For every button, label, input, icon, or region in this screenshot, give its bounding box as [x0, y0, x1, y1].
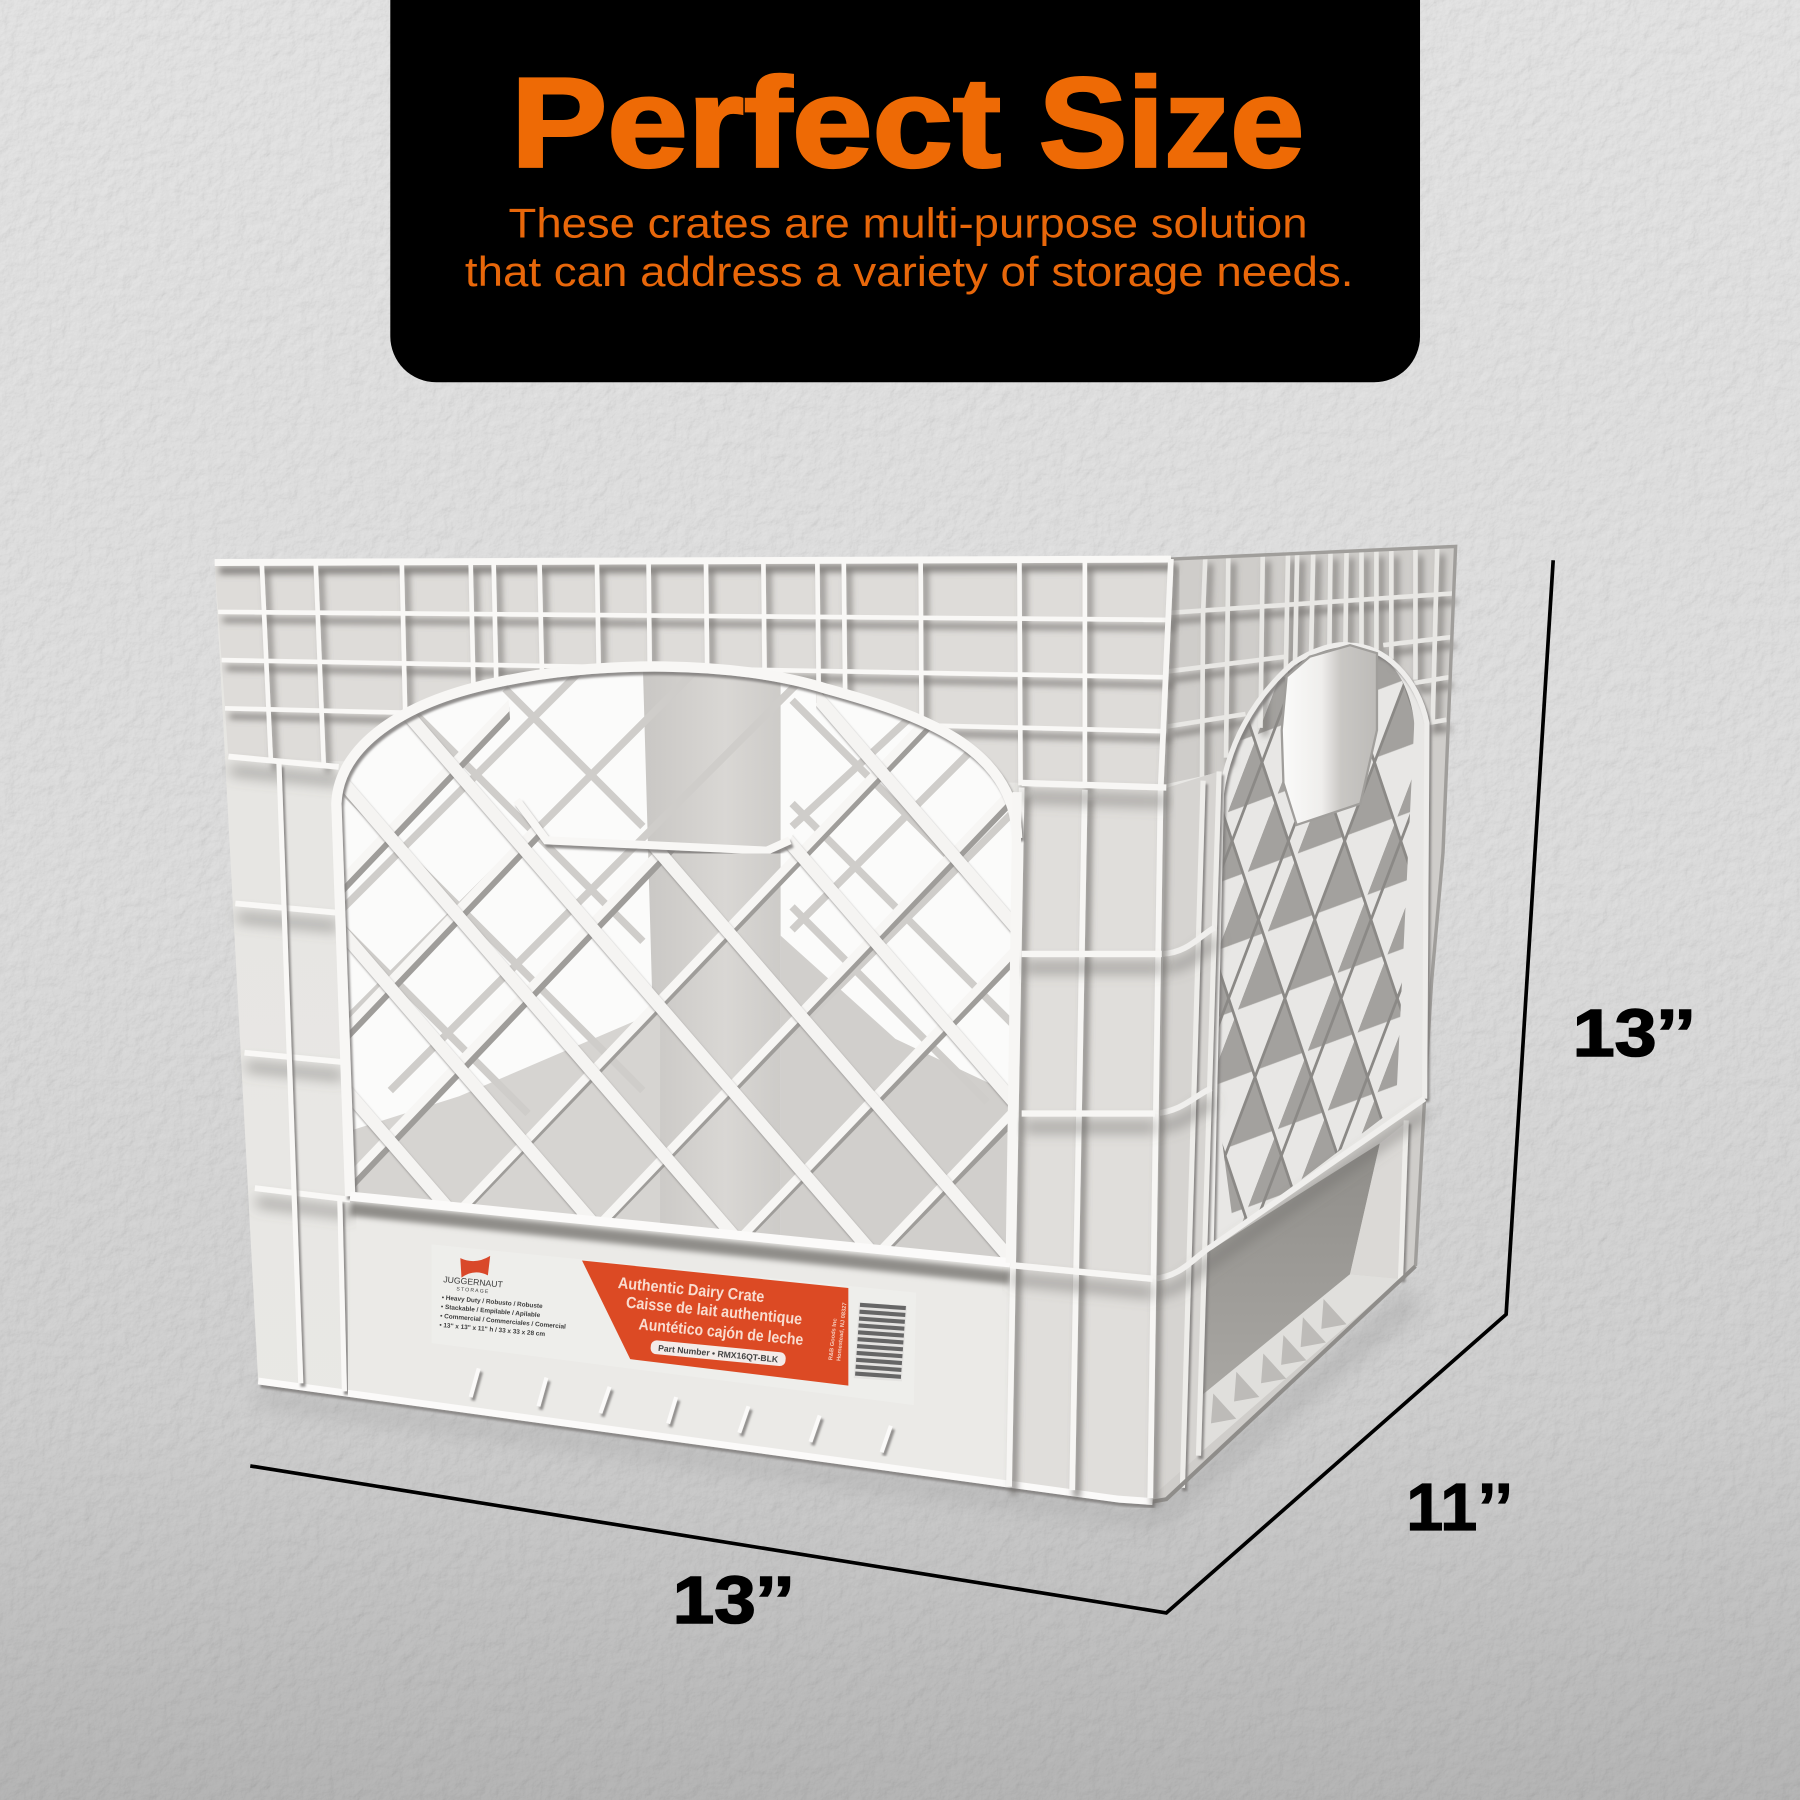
right face lower lip with teeth — [1198, 1274, 1401, 1454]
handle slot rim — [517, 800, 790, 851]
crate illustration — [214, 544, 1502, 1613]
front left column ribs — [228, 757, 350, 1200]
lower panel — [258, 1198, 1153, 1502]
brand block — [439, 1274, 570, 1340]
dimension label: width: 13’’ — [673, 1564, 794, 1638]
right face arch rim — [1211, 645, 1427, 1246]
window bottom rim — [350, 1196, 1010, 1263]
sticker — [432, 1244, 916, 1405]
subtitle: These crates are multi-purpose solution — [509, 201, 1308, 247]
brand block: • Commercial / Commerciales / Comercial — [440, 1313, 566, 1331]
maker text — [828, 1301, 848, 1361]
right face bottom edge — [1153, 1266, 1415, 1502]
brand block: • Heavy Duty / Robusto / Robuste — [441, 1294, 543, 1310]
panel: black rounded banner — [390, 0, 1420, 382]
front lattice — [344, 693, 1011, 1258]
header panel — [390, 0, 1420, 382]
gray floor right — [781, 936, 1017, 1274]
label text — [617, 1274, 804, 1349]
label text: Caisse de lait authentique — [625, 1294, 803, 1328]
front right column verticals — [1009, 559, 1171, 1498]
right face handle opening — [1282, 645, 1377, 825]
brand block: STORAGE — [456, 1286, 489, 1295]
crate right face — [1152, 544, 1460, 1503]
title: Size — [1039, 52, 1304, 194]
barcode — [854, 1302, 907, 1381]
title — [511, 52, 1304, 194]
right face horizontal bands — [1153, 928, 1425, 1279]
gray floor left — [354, 1015, 660, 1223]
dimension label: depth: 11’’ — [1406, 1471, 1513, 1545]
crate front face — [214, 556, 1180, 1509]
front window interior — [343, 672, 1012, 1258]
subtitle — [465, 201, 1353, 295]
front right column bands — [1010, 783, 1166, 1279]
label text: Authentic Dairy Crate — [617, 1274, 765, 1306]
back wall lattice — [343, 677, 1010, 1094]
label text: Auntético cajón de leche — [638, 1315, 804, 1349]
right face top grid — [1166, 546, 1452, 786]
right face outer rim — [1171, 546, 1456, 1266]
subtitle: that can address a variety of storage needs. — [465, 249, 1353, 295]
maker text: Homestead, NJ 08327 — [836, 1302, 848, 1361]
title: Perfect — [511, 52, 1001, 194]
right face corner columns — [1182, 771, 1406, 1488]
brand block: • Stackable / Empilable / Apilable — [441, 1304, 541, 1319]
front right column shade — [1010, 788, 1161, 1498]
right face window — [1211, 645, 1427, 1246]
maker text: R&B Goods Inc — [828, 1317, 839, 1361]
front left column verticals — [279, 763, 344, 1391]
crate contact shadow — [258, 1286, 1423, 1527]
brand block: JUGGERNAUT — [443, 1274, 504, 1290]
dimension label: height: 13’’ — [1573, 997, 1696, 1071]
dimension lines — [250, 560, 1553, 1613]
sticker backing — [432, 1244, 916, 1405]
brand logo flag — [460, 1256, 490, 1278]
front top grid — [215, 559, 1171, 788]
right face corner column shade — [1150, 771, 1219, 1498]
part number pill: Part Number • RMX16QT-BLK — [658, 1343, 779, 1364]
right face light end column — [1350, 1122, 1407, 1279]
bottom ticks — [471, 1368, 891, 1452]
right face lattice — [1218, 656, 1414, 1222]
front grid base shade — [215, 559, 1171, 788]
gray centre column — [643, 666, 781, 1274]
front window rim — [336, 666, 1017, 1196]
right face lower dark panel — [1200, 1143, 1380, 1397]
window right jamb — [1010, 792, 1017, 1263]
orange label — [582, 1260, 848, 1386]
brand block: • 13" x 13" x 11" h / 33 x 33 x 28 cm — [439, 1322, 546, 1338]
